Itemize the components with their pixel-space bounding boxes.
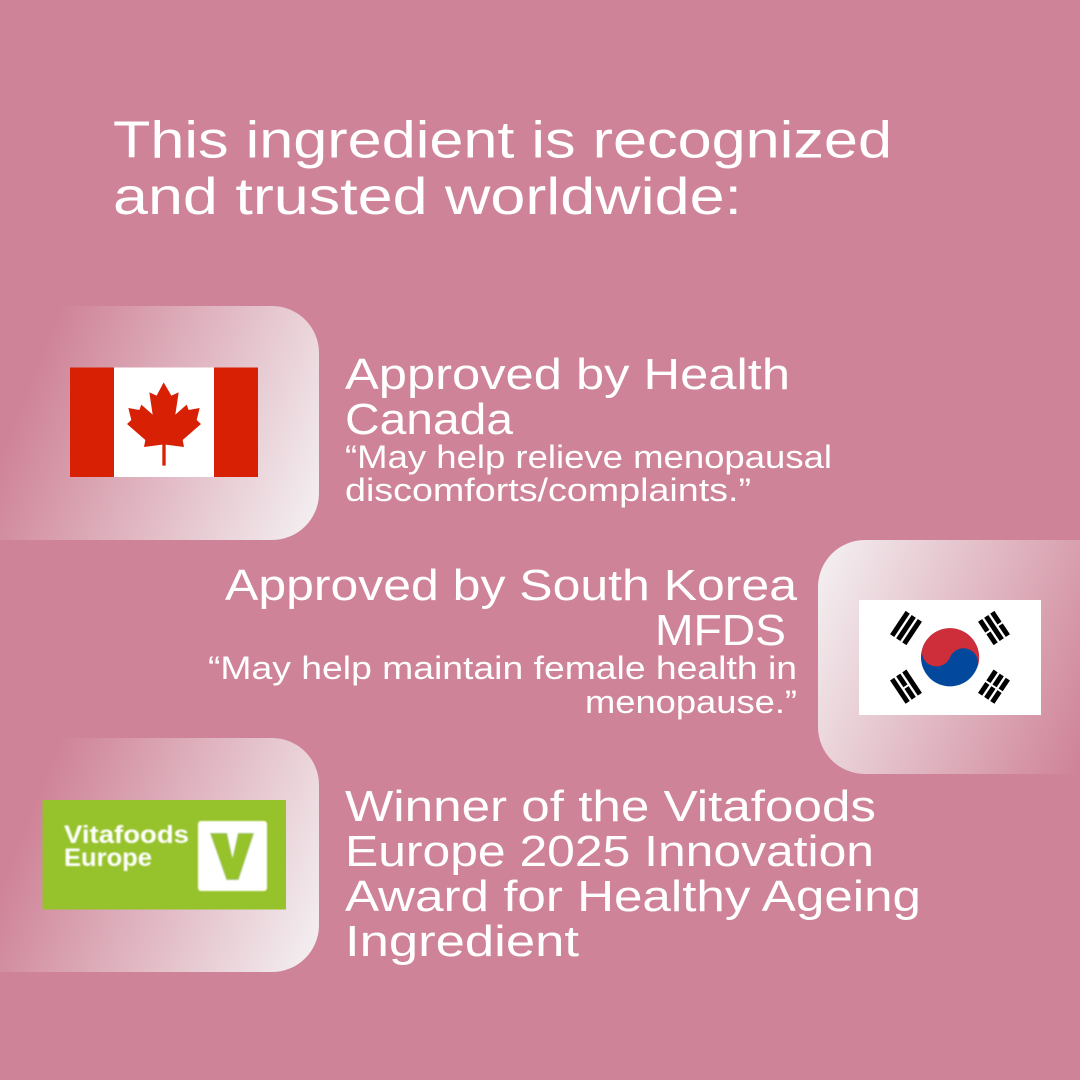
panel: Vitafoods Europe card — [0, 738, 319, 972]
title: This ingredient is recognized — [113, 112, 892, 170]
icon: Vitafoods Europe logo: Europe — [64, 844, 152, 872]
text block: South Korea MFDS approval: menopause.” — [585, 684, 797, 720]
text block: Health Canada approval: Canada — [345, 395, 514, 444]
text block: Health Canada approval — [345, 350, 832, 508]
text block: Vitafoods award — [345, 782, 921, 966]
text block: South Korea MFDS approval: “May help maintain female health in — [208, 650, 797, 686]
text block: Vitafoods award: Europe 2025 Innovation — [345, 827, 874, 876]
text block: Health Canada approval: discomforts/complaints.” — [345, 472, 751, 508]
text block: Health Canada approval: Approved by Health — [345, 350, 790, 399]
panel: Canada flag card — [0, 306, 319, 540]
text block: South Korea MFDS approval: MFDS — [655, 606, 786, 655]
title — [113, 112, 892, 226]
text block: South Korea MFDS approval: Approved by South Korea — [225, 561, 798, 610]
text block: Health Canada approval: “May help relieve menopausal — [345, 439, 832, 475]
icon: South Korean flag — [859, 600, 1041, 715]
text block: Vitafoods award: Award for Healthy Ageing — [345, 872, 921, 921]
text block: Vitafoods award: Ingredient — [345, 917, 579, 966]
title: and trusted worldwide: — [113, 168, 742, 226]
text block: South Korea MFDS approval — [208, 561, 798, 720]
text block: Vitafoods award: Winner of the Vitafoods — [345, 782, 876, 831]
panel: South Korea flag card — [818, 540, 1080, 774]
icon: Canadian flag — [70, 368, 258, 477]
icon: Vitafoods Europe logo — [42, 800, 286, 910]
icon: Vitafoods Europe logo: Vitafoods — [64, 821, 189, 849]
